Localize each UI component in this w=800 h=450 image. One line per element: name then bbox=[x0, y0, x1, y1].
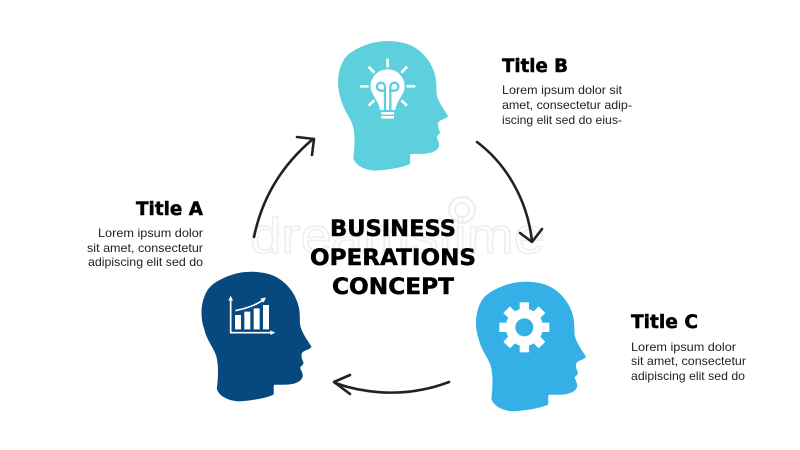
text block: Title B: Title B bbox=[502, 55, 568, 77]
text block: Title A bbox=[87, 198, 203, 269]
head C: gear bbox=[476, 282, 586, 411]
text block: Title A: Title A bbox=[136, 198, 203, 220]
text block: Title C bbox=[631, 311, 746, 383]
text block: Title A: Lorem ipsum dolor bbox=[98, 226, 203, 240]
center title: BUSINESS bbox=[330, 217, 456, 242]
watermark: dreamstime bbox=[250, 208, 545, 264]
text block: Title B bbox=[502, 55, 632, 127]
head silhouette B bbox=[338, 41, 448, 171]
head silhouette A bbox=[201, 272, 311, 401]
icon: bar chart bbox=[228, 296, 275, 335]
center title bbox=[310, 217, 476, 300]
center title: CONCEPT bbox=[332, 275, 454, 300]
arrow: C to A bbox=[334, 375, 449, 394]
text block: Title B: amet, consectetur adip- bbox=[502, 98, 632, 112]
text block: Title C: sit amet, consectetur bbox=[631, 354, 746, 368]
head A: chart bbox=[201, 272, 311, 401]
text block: Title A: sit amet, consectetur bbox=[87, 241, 203, 255]
text block: Title C: Title C bbox=[631, 311, 698, 333]
text block: Title B: iscing elit sed do eius- bbox=[502, 113, 622, 127]
text block: Title C: adipiscing elit sed do bbox=[631, 369, 745, 383]
center title: OPERATIONS bbox=[310, 246, 476, 271]
arrow: B to C bbox=[477, 142, 542, 242]
text block: Title B: Lorem ipsum dolor sit bbox=[502, 83, 623, 97]
text block: Title A: adipiscing elit sed do bbox=[88, 255, 203, 269]
icon: light bulb bbox=[360, 59, 415, 117]
text block: Title C: Lorem ipsum dolor bbox=[631, 340, 736, 354]
arrow: A to B bbox=[254, 137, 314, 237]
head B: light bulb bbox=[338, 41, 448, 171]
icon: gear bbox=[499, 302, 549, 352]
head silhouette C bbox=[476, 282, 586, 411]
